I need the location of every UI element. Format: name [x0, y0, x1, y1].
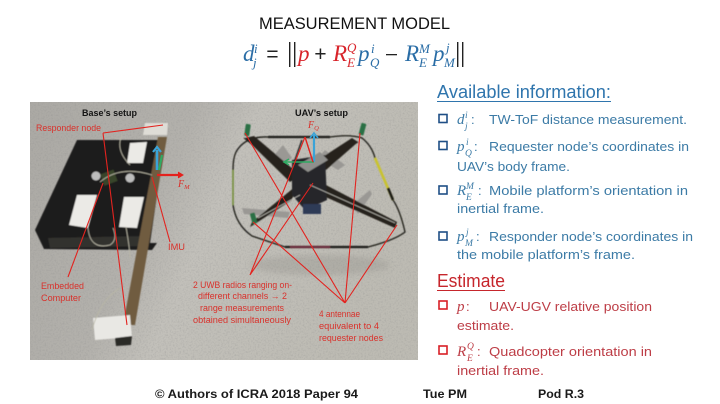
label: UWB radios: [193, 280, 292, 325]
item: d: j: [463, 122, 468, 132]
item: p_M: j: [464, 228, 469, 238]
item: R_E^M: R: [456, 183, 466, 199]
formula: d: [243, 41, 255, 66]
item: p_Q: Q: [465, 149, 472, 159]
label: F_Q: F: [308, 120, 314, 131]
footer: © Authors of ICRA 2018 Paper 94: [155, 389, 359, 401]
item: d: TW-ToF distance measurement.: [489, 112, 687, 127]
item: p estimate: p: [456, 299, 465, 315]
formula: +: [314, 43, 326, 66]
label: UWB radios: obtained simultaneously: [193, 315, 292, 325]
formula: p: [431, 41, 444, 66]
item: p_Q: Requester node’s coordinates in: [489, 139, 689, 154]
formula: E: [418, 55, 427, 70]
item: R_E^Q estimate: inertial frame.: [457, 363, 544, 378]
item: R_E^Q estimate: :: [477, 344, 481, 359]
formula: j: [251, 55, 257, 70]
label: UWB radios: different channels → 2: [198, 291, 287, 301]
formula: =: [266, 43, 278, 66]
item: p_Q: UAV’s body frame.: [457, 159, 570, 174]
item: p_M: the mobile platform’s frame.: [457, 247, 635, 262]
item: d: :: [471, 112, 475, 127]
item: p estimate: estimate.: [457, 318, 514, 333]
item: R_E^Q estimate: [439, 342, 652, 378]
label: antennae: [319, 309, 383, 343]
item: R_E^Q estimate: E: [466, 354, 473, 364]
heading: available information: Available information:: [437, 81, 611, 102]
item: p_Q: p: [456, 139, 465, 155]
item: R_E^Q estimate: Q: [467, 342, 474, 352]
item: p_M: M: [464, 239, 474, 249]
label: base's setup: Base’s setup: [82, 108, 137, 119]
formula: R: [332, 41, 347, 66]
label: UWB radios: 2 UWB radios ranging on-: [193, 280, 292, 290]
heading: estimate: Estimate: [437, 270, 505, 291]
item: d: d: [457, 112, 465, 128]
item: p_Q: i: [466, 138, 469, 148]
formula: i: [371, 41, 375, 56]
base setup: [35, 123, 168, 346]
item: p_Q: :: [474, 139, 478, 154]
item: R_E^M: [439, 182, 688, 216]
formula: Q: [347, 40, 357, 55]
item: R_E^M: :: [478, 183, 482, 198]
item: p_M: p: [456, 229, 465, 245]
item: R_E^M: inertial frame.: [457, 201, 544, 216]
quadcopter: [233, 123, 405, 275]
panel: photo of experimental setup: [30, 102, 418, 360]
item: R_E^M: Mobile platform’s orientation in: [489, 183, 688, 198]
formula: R: [404, 41, 419, 66]
item: d: i: [465, 111, 468, 121]
label: responder node: Responder node: [36, 123, 101, 133]
label: embedded computer: Computer: [41, 293, 81, 303]
formula: M: [418, 41, 431, 56]
red pointer lines: [68, 125, 397, 325]
label: F_Q: Q: [314, 125, 319, 132]
label: F_M: F: [178, 179, 184, 190]
item: p estimate: UAV-UGV relative position: [489, 299, 652, 314]
formula: p: [356, 41, 370, 66]
item: p_M: :: [476, 229, 480, 244]
item: p_M: Responder node’s coordinates in: [489, 229, 693, 244]
icon: UAV axes: [284, 133, 318, 165]
formula: E: [346, 55, 355, 70]
label: antennae: 4 antennae: [319, 309, 360, 319]
label: antennae: equivalent to 4: [319, 321, 379, 331]
footer: Tue PM: [423, 389, 467, 401]
label: UWB radios: range measurements: [200, 303, 284, 313]
label: antennae: requester nodes: [319, 333, 383, 343]
footer: Pod R.3: [538, 389, 584, 401]
formula: [243, 40, 463, 70]
label: IMU: IMU: [168, 242, 185, 252]
item: p_Q: [439, 138, 689, 174]
footer: [155, 389, 584, 401]
item: p_M: [439, 228, 693, 262]
label: UAV's setup: UAV’s setup: [295, 108, 348, 119]
formula: i: [254, 41, 258, 56]
item: R_E^M: M: [465, 182, 475, 192]
formula: p: [296, 41, 310, 66]
label: embedded computer: Embedded: [41, 281, 84, 291]
formula: j: [444, 40, 450, 55]
item: R_E^M: E: [465, 193, 472, 203]
item: p estimate: [439, 299, 652, 333]
item: R_E^Q estimate: R: [456, 344, 466, 360]
formula: Q: [370, 55, 380, 70]
label: F_M: M: [183, 184, 190, 191]
title: MEASUREMENT MODEL: [259, 14, 450, 33]
item: R_E^Q estimate: Quadcopter orientation in: [489, 344, 652, 359]
item: d: [439, 111, 687, 132]
icon: base axes: [153, 147, 183, 178]
item: p estimate: :: [466, 299, 470, 314]
label: embedded computer: [41, 281, 84, 303]
formula: M: [443, 55, 456, 70]
